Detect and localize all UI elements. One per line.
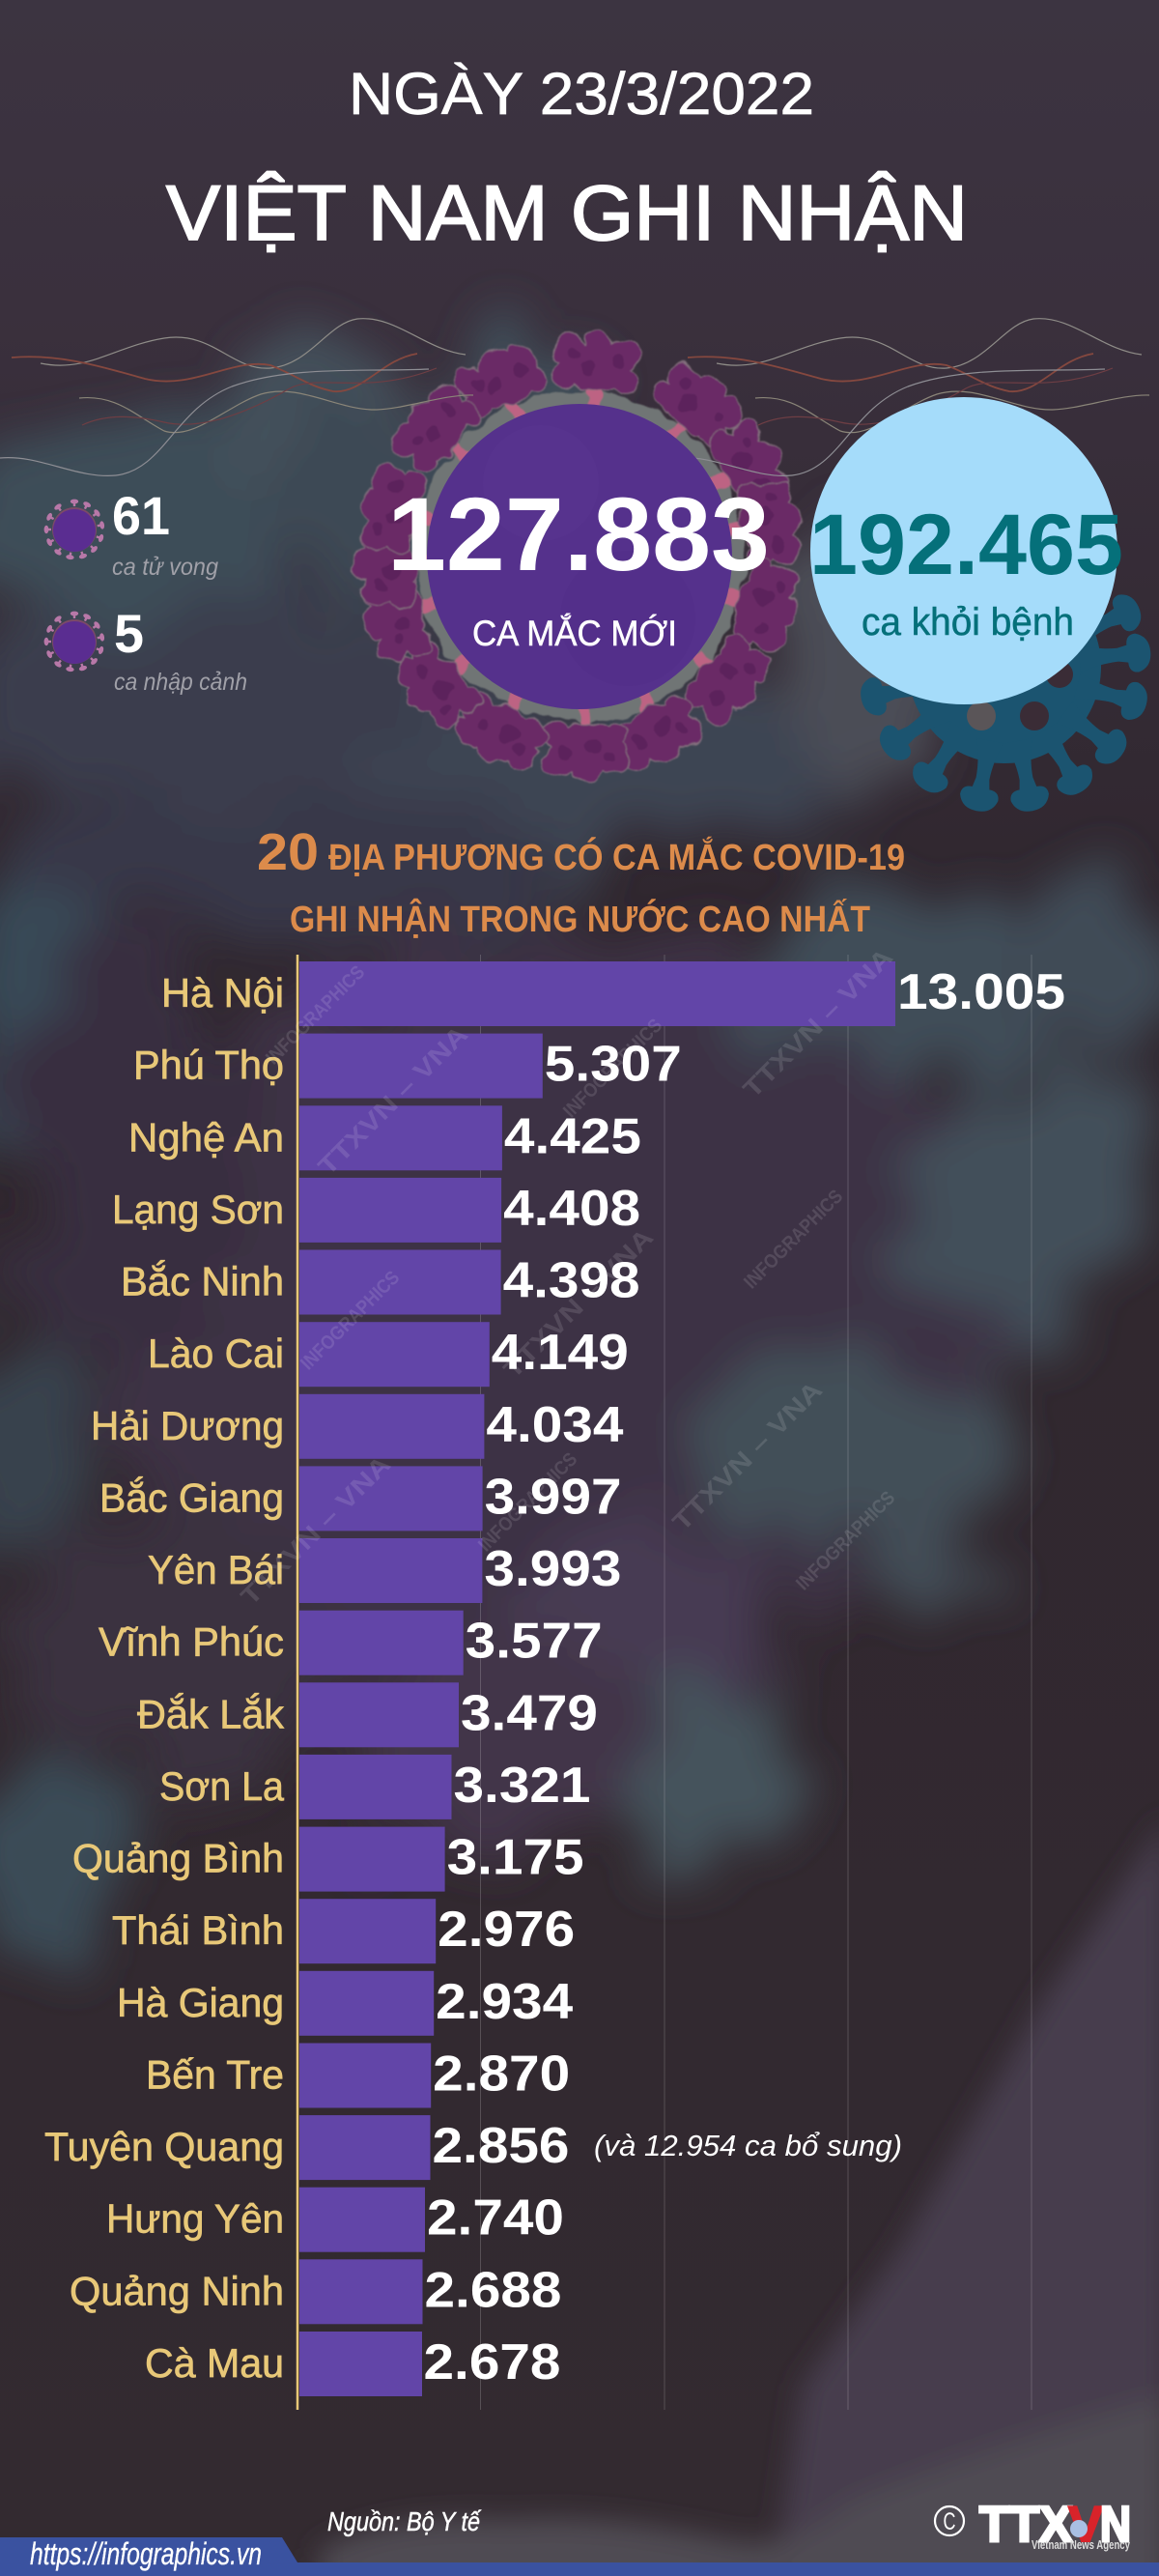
watermarks: INFOGRAPHICS: [474, 1448, 581, 1556]
row: Quảng Bình: Quảng Bình: [72, 1836, 284, 1881]
row: Lạng Sơn: Lạng Sơn: [112, 1187, 284, 1232]
row: Hà Giang: Hà Giang: [117, 1980, 284, 2025]
row: Tuyên Quang: Tuyên Quang: [44, 2124, 284, 2169]
row: Quảng Bình: 3.175: [447, 1830, 584, 1886]
row: Hà Giang: 2.934: [436, 1974, 573, 2030]
chart heading: GHI NHẬN TRONG NƯỚC CAO NHẤT: [290, 898, 870, 940]
row: Hà Giang: [117, 1971, 573, 2036]
row: Bến Tre: 2.870: [433, 2046, 570, 2103]
row: Cà Mau: Cà Mau: [145, 2340, 284, 2386]
copyright mark: [935, 2506, 964, 2535]
row: Bắc Giang: [99, 1466, 622, 1531]
row: Bắc Giang: Bắc Giang: [99, 1474, 284, 1520]
grid lines and axis: [297, 955, 1032, 2410]
main title: date: NGÀY 23/3/2022: [349, 61, 814, 127]
logo: TTXVN: N: [1100, 2497, 1131, 2553]
row: Yên Bái: Yên Bái: [148, 1547, 284, 1592]
row: Bắc Ninh: 4.398: [503, 1252, 640, 1308]
row: Sơn La: 3.321: [454, 1758, 591, 1814]
panel: recovered cases: [809, 397, 1123, 704]
row: Phú Thọ: Phú Thọ: [133, 1043, 284, 1088]
row: Lào Cai: Lào Cai: [148, 1331, 284, 1376]
row: Bến Tre: Bến Tre: [146, 2052, 284, 2097]
purple circle: [427, 404, 732, 709]
row: Hà Nội: [161, 961, 1065, 1026]
row: Nghệ An: Nghệ An: [128, 1114, 284, 1159]
icon: small virus: [44, 500, 105, 560]
row: Đắk Lắk: [137, 1682, 598, 1747]
row: Hải Dương: 4.034: [486, 1397, 623, 1453]
row: Thái Bình: Thái Bình: [112, 1907, 284, 1953]
chart heading: ĐỊA PHƯƠNG CÓ CA MẮC COVID-19: [328, 836, 905, 878]
row: Sơn La: Sơn La: [159, 1763, 285, 1809]
row: Hưng Yên: Hưng Yên: [106, 2196, 284, 2242]
panel: imported cases: [44, 603, 247, 696]
icon: blue virus: [857, 570, 1152, 815]
watermarks: TTXVN – VNA: [737, 942, 898, 1103]
row: Đắk Lắk: 3.479: [461, 1685, 598, 1741]
row: Nghệ An: 4.425: [504, 1108, 641, 1164]
imported label: ca nhập cảnh: [114, 669, 247, 696]
watermarks: INFOGRAPHICS: [559, 1015, 666, 1122]
row: Hải Dương: [91, 1394, 623, 1459]
watermarks: INFOGRAPHICS: [792, 1487, 899, 1594]
row: Quảng Ninh: Quảng Ninh: [70, 2268, 284, 2313]
row: Cà Mau: [145, 2332, 560, 2396]
watermarks: INFOGRAPHICS: [262, 961, 369, 1069]
row: Yên Bái: [148, 1538, 621, 1603]
watermarks: INFOGRAPHICS: [740, 1186, 847, 1293]
watermarks: TTXVN – VNA: [312, 1019, 473, 1181]
row: Hưng Yên: [106, 2188, 564, 2252]
row: Thái Bình: [112, 1899, 575, 1963]
panel: new cases: [387, 404, 770, 709]
note: additional cases: (và 12.954 ca bổ sung): [594, 2129, 902, 2162]
deaths label: ca tử vong: [112, 554, 218, 581]
row: Yên Bái: 3.993: [484, 1541, 621, 1597]
row: Hà Nội: Hà Nội: [161, 970, 284, 1016]
decorative waves right: [676, 319, 1149, 475]
panel: deaths: [44, 485, 218, 581]
watermarks: INFOGRAPHICS: [297, 1267, 404, 1374]
row: Hải Dương: Hải Dương: [91, 1403, 284, 1448]
copyright mark: C: [943, 2508, 956, 2535]
row: Tuyên Quang: 2.856: [433, 2118, 570, 2174]
row: Quảng Bình: [72, 1827, 584, 1892]
watermarks: TTXVN – VNA: [497, 1222, 659, 1384]
logo: TTXVN: [935, 2497, 1131, 2553]
icon: small virus: [44, 612, 105, 673]
imported number: 5: [114, 603, 144, 664]
row: Lào Cai: [148, 1322, 629, 1387]
row: Lào Cai: 4.149: [492, 1325, 629, 1381]
icon: coronavirus illustration: [351, 329, 808, 783]
watermarks: [235, 942, 899, 1611]
recovered number: 192.465: [809, 496, 1123, 592]
row: Lạng Sơn: 4.408: [503, 1181, 640, 1237]
row: Sơn La: [159, 1755, 591, 1819]
chart heading: 20: [257, 823, 319, 881]
row: Cà Mau: 2.678: [423, 2334, 560, 2390]
row: Thái Bình: 2.976: [438, 1902, 575, 1958]
main title: Việt Nam ghi nhận: VIỆT NAM GHI NHẬN: [166, 170, 968, 257]
light blue circle: [810, 397, 1117, 704]
logo: TTXVN: V: [1068, 2497, 1103, 2553]
footer band: [0, 2536, 1159, 2576]
row: Nghệ An: [128, 1105, 641, 1170]
row: Bến Tre: [146, 2043, 570, 2108]
row: Quảng Ninh: [70, 2259, 562, 2324]
watermarks: TTXVN – VNA: [235, 1449, 396, 1611]
source note: Nguồn: Bộ Y tế: [327, 2506, 482, 2536]
chart heading: [257, 823, 905, 940]
website url: https://infographics.vn: [30, 2536, 262, 2571]
row: Tuyên Quang: [44, 2115, 902, 2180]
row: Bắc Ninh: Bắc Ninh: [121, 1258, 284, 1304]
recovered label: ca khỏi bệnh: [862, 601, 1074, 644]
row: Vĩnh Phúc: Vĩnh Phúc: [99, 1619, 284, 1665]
row: Quảng Ninh: 2.688: [425, 2262, 562, 2318]
logo: TTXVN: TTX: [979, 2497, 1072, 2553]
decorative waves left: [0, 319, 473, 475]
bar chart: [44, 955, 1065, 2410]
row: Hưng Yên: 2.740: [427, 2190, 564, 2247]
row: Đắk Lắk: Đắk Lắk: [137, 1691, 285, 1736]
row: Lạng Sơn: [112, 1178, 640, 1243]
row: Phú Thọ: [133, 1034, 682, 1099]
row: Bắc Ninh: [121, 1250, 640, 1314]
row: Bắc Giang: 3.997: [485, 1469, 622, 1525]
row: Phú Thọ: 5.307: [545, 1037, 682, 1093]
new cases number: 127.883: [387, 475, 770, 592]
watermarks: TTXVN – VNA: [666, 1375, 828, 1536]
row: Hà Nội: 13.005: [897, 964, 1065, 1020]
new cases label: CA MẮC MỚI: [472, 613, 677, 653]
row: Vĩnh Phúc: 3.577: [466, 1614, 603, 1670]
row: Vĩnh Phúc: [99, 1611, 603, 1675]
deaths number: 61: [112, 485, 170, 546]
